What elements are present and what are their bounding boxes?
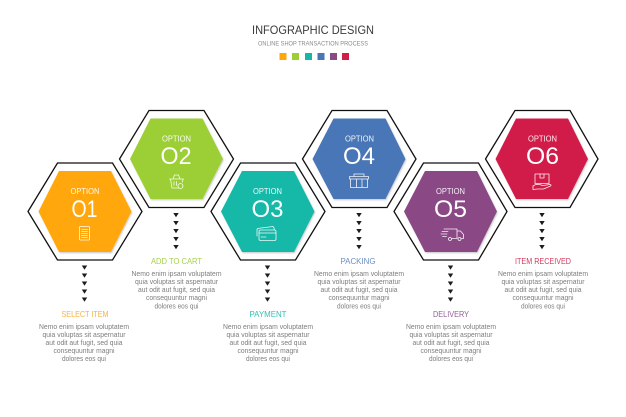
description xyxy=(314,270,404,310)
step label: ADD TO CART xyxy=(151,256,202,266)
purple hexagon xyxy=(404,171,497,252)
description: consequuntur magni xyxy=(146,294,207,302)
arrows down xyxy=(265,266,270,302)
option label: OPTION xyxy=(528,134,557,144)
outer hexagon outline xyxy=(302,110,416,208)
teal hexagon xyxy=(221,171,314,252)
number 01: O1 xyxy=(72,196,98,223)
description: Nemo enim ipsam voluptatem xyxy=(132,270,222,278)
icon: shopping basket xyxy=(170,175,184,188)
description: consequuntur magni xyxy=(512,294,574,302)
icon: hand holding a box xyxy=(533,174,551,190)
description xyxy=(498,270,588,310)
panel: option 02 xyxy=(120,110,234,310)
description xyxy=(406,323,496,363)
description: Nemo enim ipsam voluptatem xyxy=(314,270,404,278)
step label: PACKING xyxy=(340,256,376,266)
description: quia voluptas sit aspernatur xyxy=(318,278,401,286)
number 06: O6 xyxy=(526,143,559,170)
description: Nemo enim ipsam voluptatem xyxy=(406,323,496,331)
description: dolores eos qui xyxy=(154,302,199,310)
icon: document xyxy=(80,226,90,240)
description: aut odit aut fugit, sed quia xyxy=(230,339,307,347)
outer hexagon outline xyxy=(486,110,598,208)
description: consequuntur magni xyxy=(420,347,482,355)
step label: SELECT ITEM xyxy=(62,309,109,319)
description: dolores eos qui xyxy=(429,355,473,363)
description xyxy=(223,323,313,363)
description: consequuntur magni xyxy=(328,294,390,302)
description: Nemo enim ipsam voluptatem xyxy=(39,323,129,331)
description: aut odit aut fugit, sed quia xyxy=(138,286,215,294)
description: quia voluptas sit aspernatur xyxy=(410,331,493,339)
outer hexagon outline xyxy=(120,110,234,208)
description: quia voluptas sit aspernatur xyxy=(502,278,585,286)
option label: OPTION xyxy=(70,187,100,196)
description: quia voluptas sit aspernatur xyxy=(42,331,126,339)
description: aut odit aut fugit, sed quia xyxy=(504,286,582,294)
description: quia voluptas sit aspernatur xyxy=(135,278,219,286)
number 04: O4 xyxy=(343,143,375,170)
description: Nemo enim ipsam voluptatem xyxy=(498,270,588,278)
panel: option 06 xyxy=(486,110,598,310)
number 02: O2 xyxy=(160,143,192,170)
description: dolores eos qui xyxy=(521,302,565,310)
blue hexagon xyxy=(312,118,406,199)
step label: ITEM RECEIVED xyxy=(515,256,571,266)
colour key squares xyxy=(280,53,349,60)
description: consequuntur magni xyxy=(54,347,115,355)
description: dolores eos qui xyxy=(337,302,381,310)
icon: credit cards xyxy=(257,227,276,240)
option label: OPTION xyxy=(162,134,191,144)
option label: OPTION xyxy=(436,187,465,196)
description: dolores eos qui xyxy=(62,355,106,363)
step label: PAYMENT xyxy=(250,309,286,319)
panel: option 04 xyxy=(302,110,416,310)
description: quia voluptas sit aspernatur xyxy=(226,331,310,339)
arrows down xyxy=(539,213,545,249)
option label: OPTION xyxy=(253,187,282,196)
description: dolores eos qui xyxy=(246,355,290,363)
outer hexagon outline xyxy=(211,163,325,260)
outer hexagon outline xyxy=(394,163,507,260)
option label: OPTION xyxy=(345,134,374,144)
description: aut odit aut fugit, sed quia xyxy=(320,286,398,294)
number 03: O3 xyxy=(252,196,284,223)
description: consequuntur magni xyxy=(238,347,299,355)
icon: package box xyxy=(350,174,368,188)
panel: option 01 xyxy=(28,163,142,363)
orange hexagon xyxy=(38,171,132,252)
arrows down xyxy=(356,213,362,249)
description: Nemo enim ipsam voluptatem xyxy=(223,323,313,331)
arrows down xyxy=(448,266,453,302)
outer hexagon outline xyxy=(28,163,142,260)
panel: option 05 xyxy=(394,163,507,363)
title: INFOGRAPHIC DESIGN xyxy=(252,23,374,37)
description xyxy=(39,323,129,363)
description: aut odit aut fugit, sed quia xyxy=(46,339,123,347)
icon: delivery truck xyxy=(441,229,464,240)
green hexagon xyxy=(130,118,223,199)
red hexagon xyxy=(496,118,588,199)
panel: option 03 xyxy=(211,163,325,363)
description xyxy=(132,270,222,310)
arrows down xyxy=(173,213,179,249)
arrows down xyxy=(82,266,87,302)
step label: DELIVERY xyxy=(433,309,469,319)
subtitle: ONLINE SHOP TRANSACTION PROCESS xyxy=(258,40,369,48)
number 05: O5 xyxy=(434,196,467,223)
description: aut odit aut fugit, sed quia xyxy=(412,339,490,347)
